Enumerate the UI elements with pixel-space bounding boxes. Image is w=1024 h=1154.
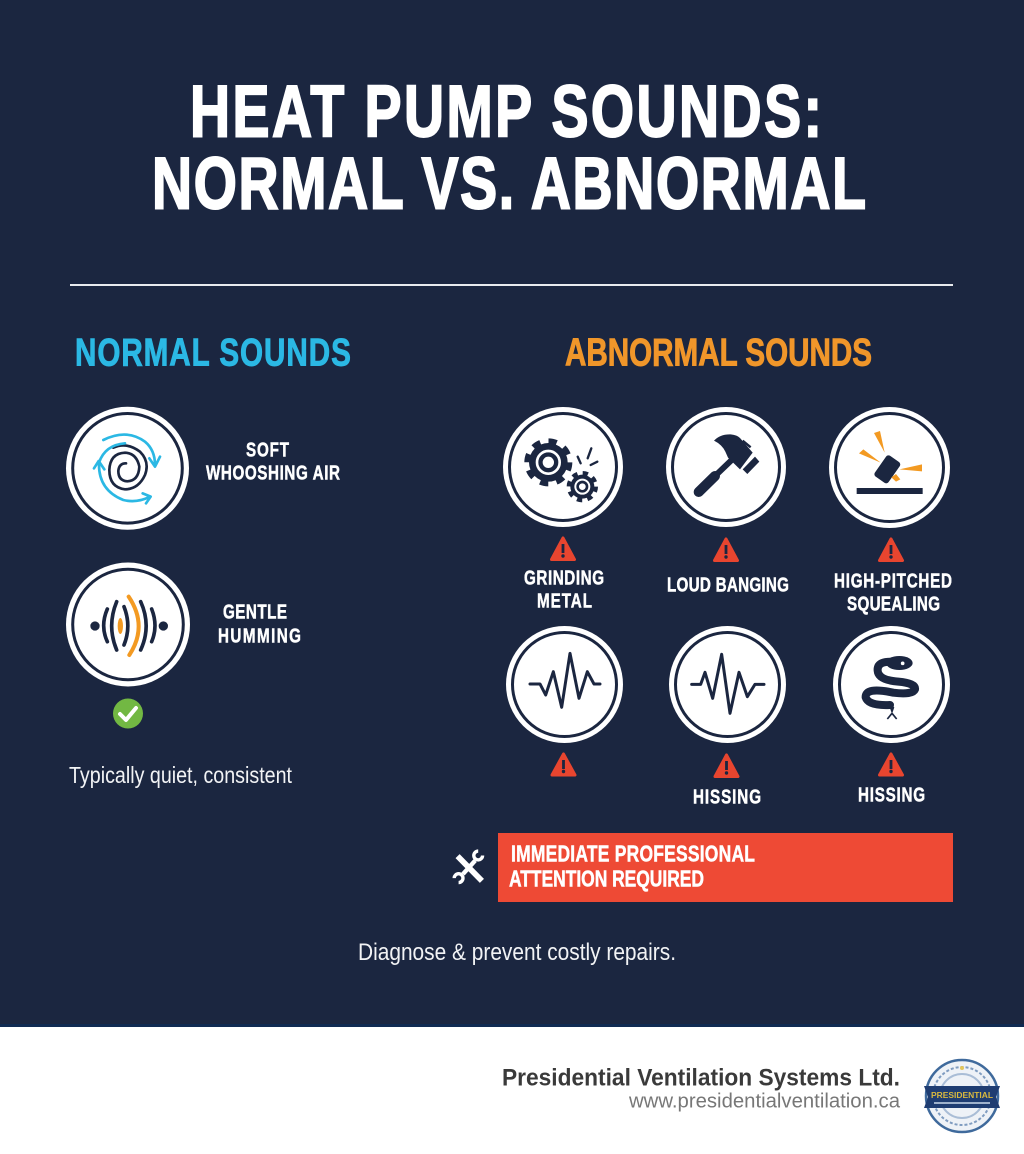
title: HEAT PUMP SOUNDS: <box>190 70 822 152</box>
label: grinding metal: GRINDING <box>524 566 604 589</box>
warning icon <box>880 754 902 775</box>
warning icon <box>552 754 575 775</box>
footer <box>0 1024 1024 1154</box>
icon: waveform two <box>669 626 786 743</box>
label: hissing: HISSING <box>693 785 761 808</box>
label: hissing: HISSING <box>858 783 925 806</box>
warning icon <box>714 539 738 560</box>
panel: normal sounds <box>66 332 351 788</box>
icon: gentle humming <box>66 562 190 686</box>
website: www.presidentialventilation.ca <box>628 1090 901 1112</box>
label: high-pitched squealing <box>834 569 952 615</box>
label: soft whooshing air: SOFT <box>246 438 289 461</box>
heading: normal sounds: NORMAL SOUNDS <box>75 332 351 375</box>
icon: soft whooshing air <box>66 407 189 530</box>
warning icon <box>552 538 574 560</box>
label: loud banging: LOUD BANGING <box>667 573 789 596</box>
label: high-pitched squealing: HIGH-PITCHED <box>834 569 952 592</box>
label: gentle humming: GENTLE <box>223 600 287 623</box>
icon: hissing snake <box>833 626 950 743</box>
label: gentle humming <box>218 600 301 647</box>
icon: green check <box>113 698 143 728</box>
title <box>152 70 866 224</box>
icon: loud banging hammer <box>666 407 786 527</box>
icon: waveform one <box>506 626 623 743</box>
callout: immediate professional attention: IMMEDIATE PROFESSIONAL <box>511 843 755 867</box>
icon: grinding metal gears <box>503 407 623 527</box>
company name: Presidential Ventilation Systems Ltd. <box>502 1065 900 1092</box>
warning icon <box>715 755 738 776</box>
label: grinding metal: METAL <box>537 589 592 612</box>
title: NORMAL VS. ABNORMAL <box>152 142 866 224</box>
label: soft whooshing air: WHOOSHING AIR <box>206 461 340 484</box>
icon: crossed tools <box>454 851 483 883</box>
text: typically quiet: Typically quiet, consistent <box>69 762 293 788</box>
warning icon <box>880 539 902 560</box>
label: soft whooshing air <box>206 438 340 484</box>
panel: abnormal sounds <box>454 332 953 902</box>
label: gentle humming: HUMMING <box>218 624 301 647</box>
logo badge: PRESIDENTIAL <box>931 1091 993 1100</box>
icon: high-pitched squealing impact <box>829 407 950 528</box>
text: diagnose and prevent: Diagnose & prevent costly repairs. <box>358 939 676 966</box>
logo badge <box>924 1060 1000 1132</box>
label: grinding metal <box>524 566 604 612</box>
heading: abnormal sounds: ABNORMAL SOUNDS <box>565 332 872 375</box>
label: high-pitched squealing: SQUEALING <box>847 592 940 615</box>
callout: immediate professional attention: ATTENTION REQUIRED <box>509 868 704 892</box>
callout: immediate professional attention <box>498 833 953 902</box>
